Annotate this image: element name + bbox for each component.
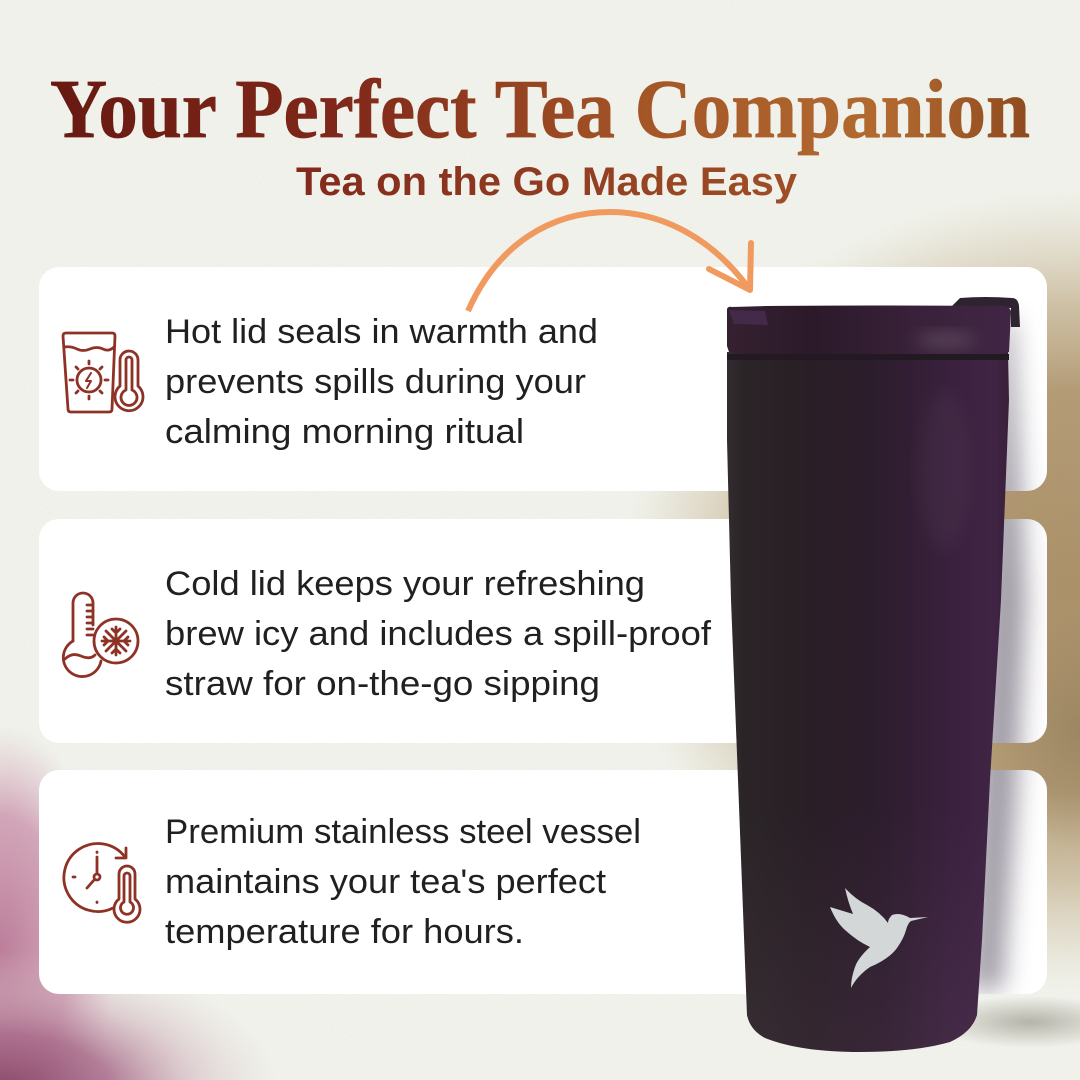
text: hot lid description: prevents spills during your bbox=[165, 363, 586, 401]
tumbler bbox=[727, 297, 1020, 1052]
panel: hot lid card bbox=[39, 267, 1047, 491]
icon: glass with heat and thermometer bbox=[63, 333, 143, 412]
panel: cold lid card bbox=[39, 519, 1047, 743]
text: hot lid description bbox=[165, 313, 598, 451]
text: stainless steel description: maintains your tea's perfect bbox=[165, 863, 607, 901]
icon: thermometer with snowflake bbox=[63, 593, 138, 677]
icon: hummingbird logo bbox=[830, 888, 928, 988]
lid tab bbox=[952, 297, 1020, 327]
text: hot lid description: calming morning ritual bbox=[165, 413, 524, 451]
lid bbox=[727, 306, 1011, 356]
tumbler body bbox=[727, 352, 1009, 1052]
text: stainless steel description bbox=[165, 813, 641, 951]
text: cold lid description bbox=[165, 565, 712, 703]
title: Your Perfect Tea Companion bbox=[50, 63, 1030, 156]
text: stainless steel description: temperature for hours. bbox=[165, 913, 524, 951]
text: cold lid description: straw for on-the-go sipping bbox=[165, 665, 600, 703]
panel: stainless steel card bbox=[39, 770, 1047, 994]
arrow: curved pointer to lid bbox=[468, 212, 751, 311]
text: cold lid description: brew icy and includes a spill-proof bbox=[165, 615, 712, 653]
text: hot lid description: Hot lid seals in warmth and bbox=[165, 313, 598, 351]
subtitle: Tea on the Go Made Easy bbox=[296, 160, 798, 204]
tumbler shadow on cards bbox=[970, 320, 1026, 990]
text: cold lid description: Cold lid keeps your refreshing bbox=[165, 565, 645, 603]
icon: clock with thermometer bbox=[64, 844, 140, 922]
text: stainless steel description: Premium stainless steel vessel bbox=[165, 813, 641, 851]
